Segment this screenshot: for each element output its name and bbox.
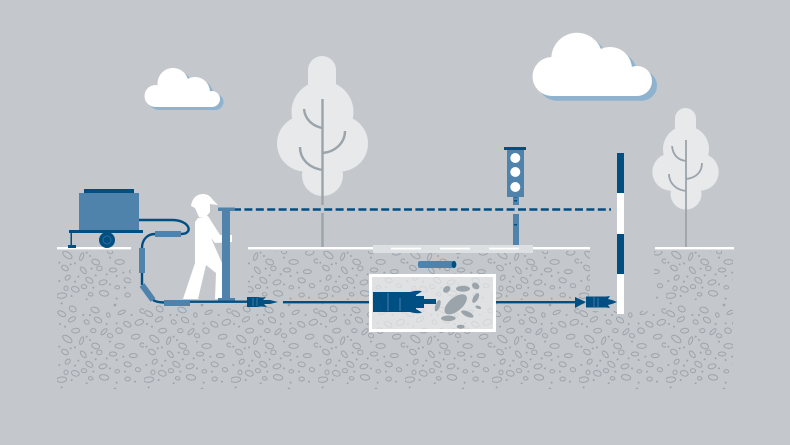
traffic light: [504, 147, 526, 245]
soil gravel texture: [57, 251, 733, 389]
small pipe segment: [418, 261, 456, 268]
tree: large: [277, 56, 368, 247]
hose: [139, 220, 189, 302]
exit drill line with arrow: [496, 297, 586, 308]
dashed reference line: [233, 208, 611, 211]
rock obstacle: [433, 281, 482, 329]
cloud: left: [144, 68, 224, 110]
trailer: [68, 189, 143, 248]
drill head: left: [247, 297, 278, 307]
worker: [183, 194, 232, 299]
locating post: [218, 208, 235, 301]
tree: small: [652, 108, 719, 247]
boring machine: [373, 291, 436, 313]
road: [373, 245, 533, 253]
inset excavation box: [370, 276, 494, 330]
cloud: right: [532, 33, 657, 101]
drill line: launch section: [164, 300, 371, 306]
drill head: right: [586, 296, 617, 308]
ground surface lines: [57, 247, 734, 249]
survey pole: [617, 153, 624, 314]
